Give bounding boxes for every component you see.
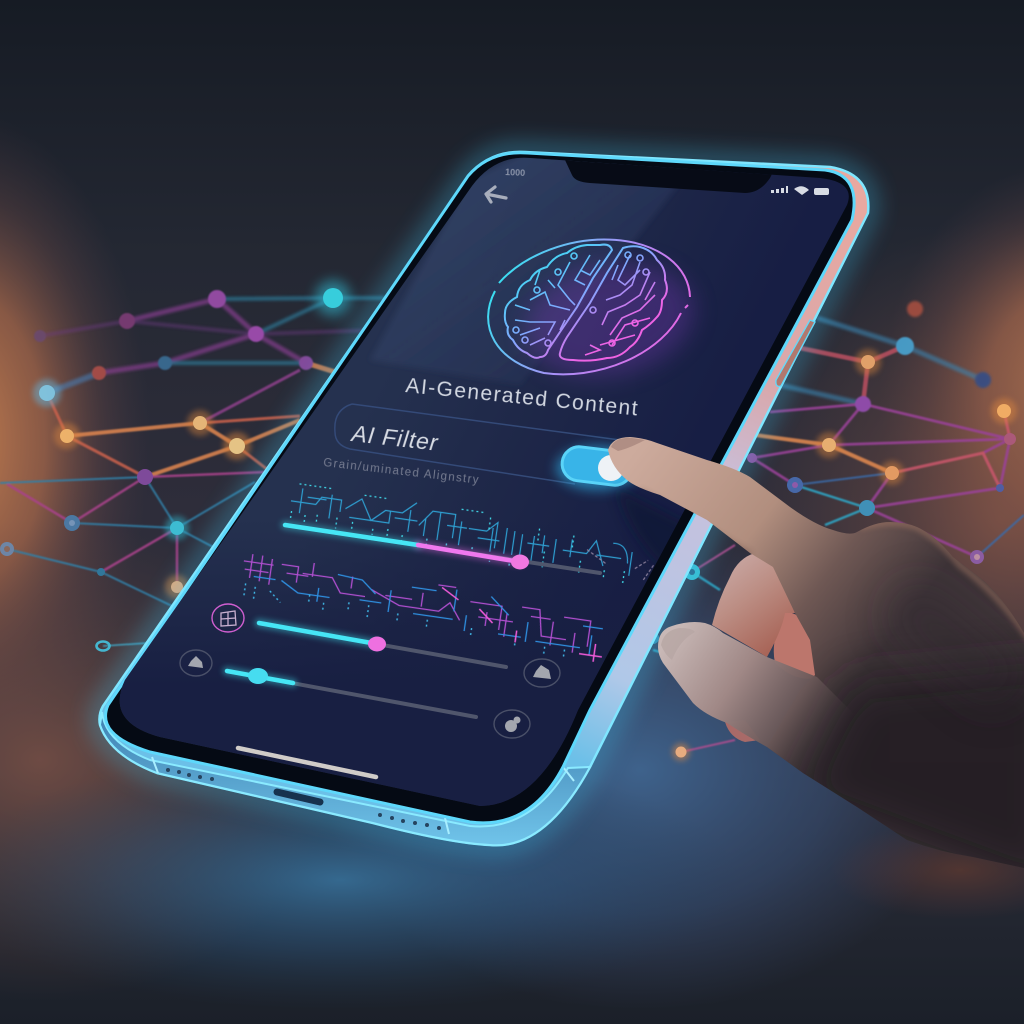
hand — [608, 437, 1024, 900]
status icons — [771, 186, 829, 195]
phone face — [106, 153, 854, 823]
network nodes — [647, 301, 1017, 761]
network graph: left — [0, 280, 385, 650]
phone — [99, 150, 868, 845]
status time: 1000 — [505, 167, 525, 178]
slider 1 knob — [511, 554, 529, 570]
bottom frame — [100, 712, 590, 845]
network nodes — [0, 280, 351, 599]
hand shading — [640, 492, 1024, 900]
pink inner finger — [774, 610, 820, 679]
toggle track — [560, 445, 634, 487]
speaker grill right — [378, 813, 441, 830]
icon: lock right — [524, 659, 560, 687]
slider 2 knob — [368, 636, 386, 652]
speaker grill left — [166, 768, 214, 781]
fingernail — [611, 438, 645, 451]
toggle glow — [556, 446, 640, 490]
network graph: right — [647, 301, 1024, 761]
slider 1 — [285, 525, 600, 573]
frame seams — [152, 757, 574, 834]
slider 2 — [259, 623, 506, 667]
screen — [100, 150, 860, 820]
heading: AI-Generated Content — [404, 374, 639, 421]
side button — [776, 320, 815, 386]
circuit band 1 — [286, 483, 665, 588]
circuit band 2 — [237, 553, 609, 663]
charging port — [277, 792, 320, 802]
slider 3 — [227, 668, 476, 717]
slider 3 knob — [248, 668, 268, 684]
home bar — [238, 748, 376, 777]
brain icon — [488, 240, 705, 391]
back arrow — [486, 187, 506, 202]
icon: lock left — [180, 650, 212, 676]
thumbnail — [661, 628, 695, 660]
icon: gear — [494, 710, 530, 738]
phone glow — [99, 152, 868, 845]
ring finger tip — [725, 720, 760, 742]
toggle knob — [598, 455, 624, 481]
back of hand and index finger — [608, 437, 1024, 868]
notch — [565, 160, 775, 193]
brain left lobe — [505, 245, 612, 358]
phone body — [99, 152, 868, 845]
filter label: AI Filter — [348, 420, 440, 456]
brain right lobe — [560, 246, 667, 361]
finger shadow on screen — [613, 483, 678, 568]
filter card — [335, 404, 620, 484]
thumb — [658, 622, 860, 780]
small caption: Grain/uminated Alignstry — [323, 457, 479, 487]
brain circuits — [513, 252, 655, 355]
AI filter row — [335, 404, 640, 490]
screen shine — [374, 158, 674, 380]
icon: grid — [212, 604, 244, 632]
middle finger — [712, 553, 795, 657]
brain ring — [488, 240, 690, 374]
